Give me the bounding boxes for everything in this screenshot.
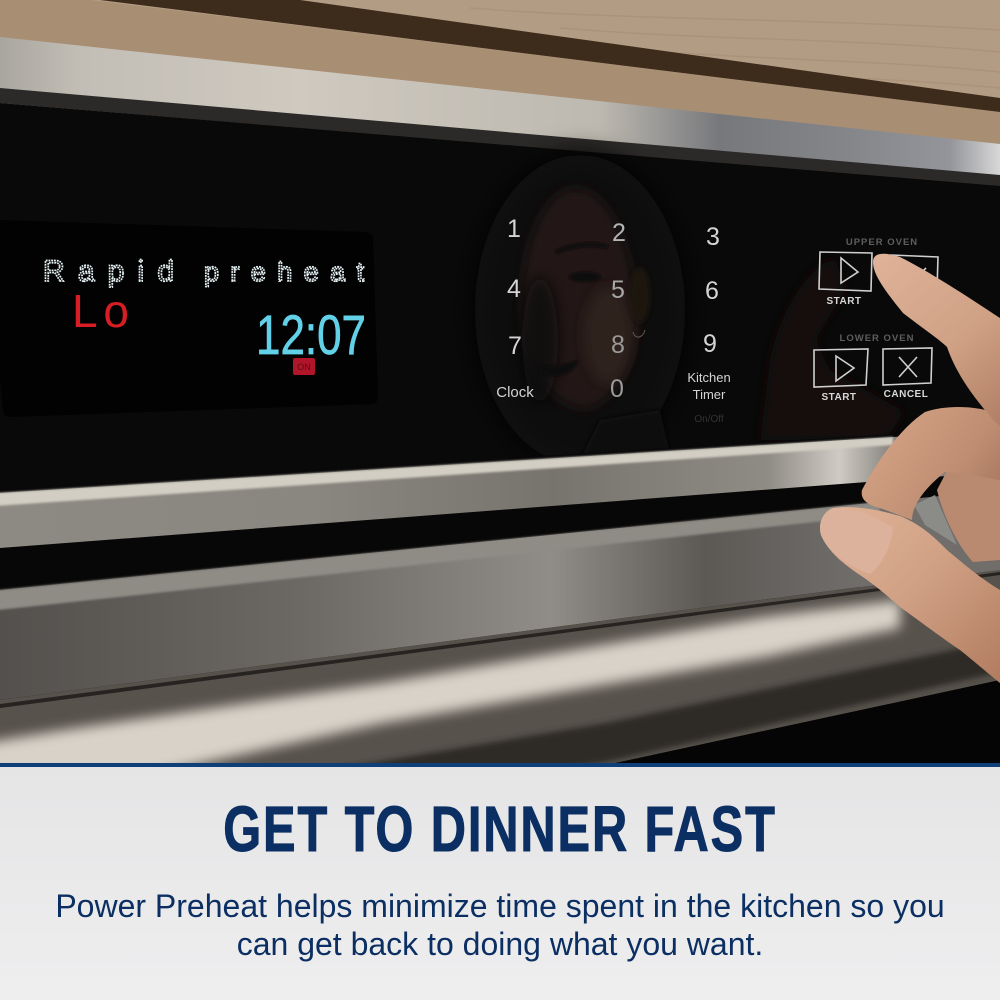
gap behind fingers [914,495,957,545]
oven controls: START [826,296,862,307]
display text: Rapid preheat [43,255,364,288]
display window [0,220,378,417]
display text: Lo: Lo [72,285,129,337]
black control panel [0,103,1000,500]
body text: can get back to doing what you want. [237,926,763,962]
third finger [937,465,1000,562]
index finger [873,254,1000,427]
keypad numbers: Timer [693,387,726,402]
face reflection [475,155,685,465]
oven controls: UPPER OVEN [846,237,918,248]
keypad numbers: Clock [496,384,534,401]
body text: Power Preheat helps minimize time spent in the kitchen so you [55,888,945,924]
keypad numbers: 8 [611,331,625,359]
hand pressing button [820,254,1000,683]
oven controls: CANCEL [884,389,928,400]
keypad numbers: 5 [611,276,625,304]
body text [55,888,945,962]
ON indicator: ON [297,362,311,372]
oven photo [0,0,1000,763]
oven controls: LOWER OVEN [840,333,914,344]
ON indicator [293,358,315,375]
keypad numbers [496,215,731,425]
display text: Rapid preheat: preheat [204,257,364,287]
keypad numbers: 4 [507,275,521,303]
upper steel trim [0,37,1000,190]
keypad numbers: On/Off [694,414,724,425]
keypad numbers: 3 [706,223,720,251]
footer panel [0,763,1000,1000]
hand reflection [760,258,905,440]
keypad numbers: 9 [703,330,717,358]
heading: GET TO DINNER FAST [223,793,777,865]
wood cabinet [0,0,1000,200]
keypad numbers: 1 [507,215,521,243]
keypad numbers: 2 [612,219,626,247]
oven controls [814,237,938,403]
display clock: 12:07 [256,303,366,366]
keypad numbers: Kitchen [687,370,731,385]
keypad numbers: 0 [610,375,624,403]
middle finger [862,407,1000,520]
oven controls: START [821,392,857,403]
keypad numbers: 7 [508,332,522,360]
keypad numbers: 6 [705,277,719,305]
thumb [820,507,1000,683]
steel handle assembly [0,430,1000,775]
thumbnail [820,509,893,574]
display text: Rapid preheat: Rapid [43,255,174,288]
